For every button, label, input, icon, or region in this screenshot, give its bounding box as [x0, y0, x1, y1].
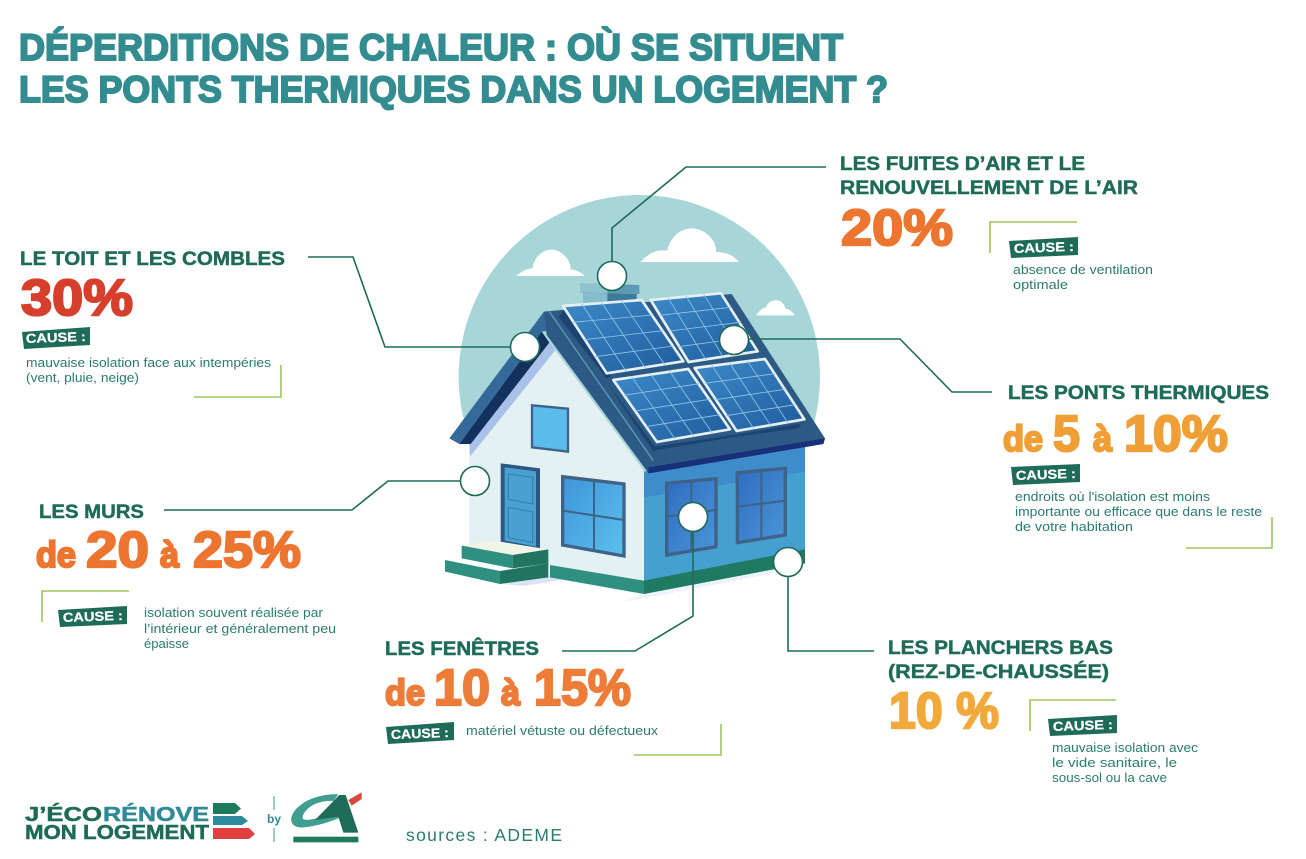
panel: planchers bas: mauvaise isolation avec — [1052, 740, 1199, 755]
panel: fenêtres: matériel vétuste ou défectueux — [466, 723, 659, 738]
sky circle — [459, 195, 820, 558]
side window 1 — [667, 479, 716, 555]
solar panels — [563, 293, 804, 442]
panel: ponts thermiques — [1003, 383, 1272, 548]
panel: fenêtres — [385, 638, 721, 755]
panel: ponts thermiques: 10% — [1124, 405, 1228, 462]
panel: murs: 20 — [86, 521, 149, 578]
roof gable — [449, 312, 555, 444]
leader lines — [164, 167, 992, 651]
panel: murs: LES MURS — [39, 502, 144, 523]
front wall — [469, 350, 644, 581]
side window 2 — [737, 468, 785, 543]
panel: ponts thermiques: CAUSE : — [1016, 466, 1076, 483]
title: LES PONTS THERMIQUES DANS UN LOGEMENT ? — [19, 69, 888, 110]
panel: murs: isolation souvent réalisée par — [144, 605, 324, 620]
panel: fenêtres: 15% — [534, 659, 631, 716]
logo: by Crédit Agricole: by — [267, 812, 281, 826]
panel: fuites d'air: 20% — [841, 199, 953, 256]
panel: murs — [36, 502, 336, 651]
logo: J'écorénove mon logement: RÉNOVE — [103, 803, 209, 826]
panel: ponts thermiques: à — [1093, 418, 1113, 459]
marker points — [460, 262, 802, 576]
panel: ponts thermiques: de votre habitation — [1015, 519, 1133, 534]
steps — [445, 541, 548, 584]
logo: J'écorénove mon logement: J’ÉCO — [25, 803, 102, 826]
title: DÉPERDITIONS DE CHALEUR : OÙ SE SITUENT — [19, 26, 843, 68]
panel: ponts thermiques: de — [1003, 418, 1043, 459]
panel: fenêtres: à — [501, 672, 521, 713]
panel: murs: l’intérieur et généralement peu — [144, 621, 336, 636]
panel: ponts thermiques: LES PONTS THERMIQUES — [1008, 383, 1269, 404]
white mask below circle — [440, 553, 840, 610]
panel: toit: 30% — [21, 269, 133, 326]
panel: planchers bas: (REZ-DE-CHAUSSÉE) — [888, 661, 1109, 683]
panel: planchers bas: CAUSE : — [1053, 717, 1113, 734]
logo: by Crédit Agricole — [267, 792, 362, 842]
base — [550, 565, 644, 594]
ground shadow — [503, 576, 565, 586]
panel: toit — [20, 249, 285, 397]
icon: clouds — [516, 228, 795, 315]
small gable window — [532, 405, 568, 452]
panel: planchers bas: LES PLANCHERS BAS — [888, 638, 1113, 659]
panel: murs: 25% — [193, 521, 301, 578]
logo: J'écorénove mon logement — [25, 803, 255, 844]
panel: fuites d'air: RENOUVELLEMENT DE L’AIR — [840, 178, 1138, 199]
roof — [544, 294, 825, 473]
panel: toit: mauvaise isolation face aux intempéries — [26, 355, 272, 370]
panel: ponts thermiques: importante ou efficace que dans le reste — [1015, 504, 1262, 519]
panel: fuites d'air: optimale — [1013, 277, 1068, 292]
panel: murs: de — [36, 534, 76, 575]
illustration: house with solar panels — [440, 195, 840, 610]
panel: fenêtres: de — [385, 672, 425, 713]
panel: planchers bas: 10 % — [889, 682, 999, 739]
panel: fuites d'air: LES FUITES D’AIR ET LE — [840, 154, 1085, 175]
panel: planchers bas: le vide sanitaire, le — [1052, 755, 1177, 770]
panel: ponts thermiques: endroits où l'isolation est moins — [1015, 489, 1211, 504]
panel: fuites d'air: absence de ventilation — [1013, 262, 1153, 277]
panel: toit: CAUSE : — [26, 329, 86, 346]
logo: J'écorénove mon logement: MON LOGEMENT — [25, 822, 209, 844]
sources: sources : ADEME — [406, 825, 562, 845]
panel: ponts thermiques: 5 — [1053, 405, 1080, 462]
panel: toit: (vent, pluie, neige) — [26, 370, 139, 385]
side wall — [644, 447, 805, 582]
panel: planchers bas: sous-sol ou la cave — [1052, 770, 1167, 785]
chimney — [580, 283, 639, 303]
panel: planchers bas — [888, 638, 1199, 785]
panel: fuites d'air — [840, 154, 1153, 292]
panel: murs: épaisse — [144, 636, 189, 651]
panel: murs: à — [160, 534, 180, 575]
front window — [563, 477, 624, 556]
panel: toit: LE TOIT ET LES COMBLES — [20, 249, 285, 270]
panel: fenêtres: LES FENÊTRES — [385, 638, 539, 660]
panel: fuites d'air: CAUSE : — [1014, 239, 1074, 256]
title — [19, 26, 888, 110]
panel: fenêtres: 10 — [434, 659, 490, 716]
door — [501, 463, 540, 548]
panel: murs: CAUSE : — [63, 608, 123, 625]
panel: fenêtres: CAUSE : — [391, 725, 449, 742]
